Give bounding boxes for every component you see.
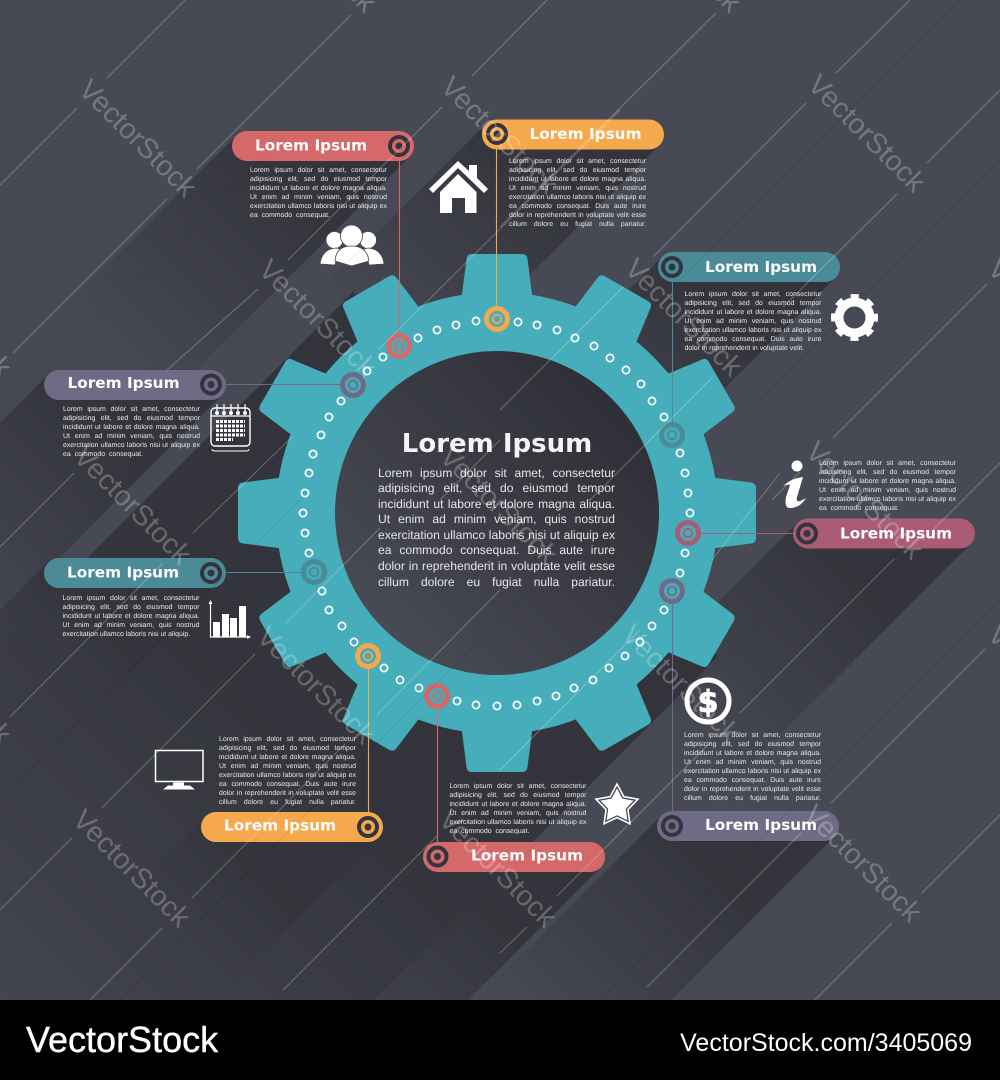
text block: red top left: Ut enim ad minim veniam, quis nostrud [250, 194, 387, 200]
pill: purple left: Lorem Ipsum [68, 374, 180, 392]
watermarks: VectorStock [615, 619, 746, 749]
icon: house [429, 161, 488, 213]
dotted ring [299, 317, 694, 710]
text block: magenta right: adipisicing elit, sed do eiusmod tempor [819, 468, 956, 476]
text block: purple left: incididunt ut labore et dolore magna aliqua. [63, 424, 200, 430]
text block: purple left: Lorem ipsum dolor sit amet, consectetur [63, 406, 200, 412]
text block: red top left: Lorem ipsum dolor sit amet, consectetur [250, 166, 387, 174]
pill: purple bottom right: Lorem Ipsum [705, 816, 817, 834]
text block: magenta right: Lorem ipsum dolor sit amet, consectetur [819, 460, 956, 466]
text block: teal top right: Lorem ipsum dolor sit amet, consectetur [684, 290, 822, 298]
icon: dollar coin [687, 680, 729, 722]
text block: orange top: ea commodo consequat. Duis aute irure [509, 202, 646, 210]
pill: orange top [482, 120, 664, 150]
text block: red bottom: Ut enim ad minim veniam, quis nostrud [450, 810, 586, 816]
center text block: incididunt ut labore et dolore magna aliqua. [378, 497, 615, 511]
center text block: cillum dolore eu fugiat nulla pariatur. [378, 575, 615, 589]
icon: bar chart [208, 600, 251, 639]
text block: orange bottom left: cillum dolore eu fugiat nulla pariatur. [219, 799, 356, 806]
watermarks: VectorStock [67, 441, 198, 571]
text block: purple bottom right: dolor in reprehenderit in voluptate velit esse [684, 786, 821, 792]
icon: monitor [156, 750, 203, 790]
text block: purple left: ea commodo consequat. [63, 450, 143, 458]
text block: teal left [62, 594, 200, 638]
center text block: dolor in reprehenderit in voluptate velit esse [378, 559, 615, 573]
text block: teal top right: exercitation ullamco laboris nisi ut aliquip ex [684, 326, 822, 334]
connector lines [224, 148, 795, 846]
footer bar [0, 1000, 1000, 1080]
text block: orange top: exercitation ullamco laboris nisi ut aliquip ex [509, 194, 646, 200]
text block: orange bottom left: dolor in reprehenderit in voluptate velit esse [219, 790, 356, 797]
text block: orange top: Lorem ipsum dolor sit amet, consectetur [509, 158, 646, 164]
text block: orange top: adipisicing elit, sed do eiusmod tempor [509, 166, 646, 174]
watermarks: VectorStock [801, 69, 932, 199]
center heading: Lorem Ipsum [402, 429, 592, 459]
text block: orange top: cillum dolore eu fugiat nulla pariatur. [509, 220, 646, 228]
text block: orange top [509, 158, 646, 228]
text block: purple bottom right: cillum dolore eu fugiat nulla pariatur. [684, 794, 821, 802]
icon: calendar [211, 404, 250, 451]
pill: magenta right: Lorem Ipsum [840, 524, 952, 542]
center text block: adipisicing elit, sed do eiusmod tempor [378, 481, 615, 495]
node: purple lower right [659, 578, 685, 604]
text block: purple left [63, 406, 200, 458]
watermarks: VectorStock [433, 441, 564, 571]
node: red bottom [424, 683, 450, 709]
node: orange lower left [355, 643, 381, 669]
pill: teal left [44, 558, 226, 588]
text block: red top left: incididunt ut labore et dolore magna aliqua. [250, 184, 387, 192]
text block: magenta right: ea commodo consequat. [819, 504, 899, 512]
footer bar: VectorStock [26, 1019, 219, 1060]
text block: purple bottom right: adipisicing elit, sed do eiusmod tempor [684, 740, 821, 748]
text block: teal top right: ea commodo consequat. Duis aute irure [684, 336, 822, 342]
text block: purple bottom right: Lorem ipsum dolor sit amet, consectetur [684, 732, 821, 738]
pill: teal left: Lorem Ipsum [67, 564, 179, 582]
center text block [378, 466, 615, 589]
watermarks: VectorStock [434, 71, 565, 201]
center text block: Lorem ipsum dolor sit amet, consectetur [378, 466, 615, 480]
icon: settings gear [834, 296, 876, 338]
long shadow: gear [0, 292, 718, 1080]
node: teal right [659, 422, 685, 448]
text block: orange bottom left: Ut enim ad minim veniam, quis nostrud [219, 763, 356, 770]
text block: teal left: exercitation ullamco laboris nisi ut aliquip. [62, 630, 190, 638]
pill: orange bottom left [201, 812, 383, 842]
text block: orange bottom left: exercitation ullamco laboris nisi ut aliquip ex [219, 772, 356, 779]
text block: purple bottom right: exercitation ullamco laboris nisi ut aliquip ex [684, 768, 821, 774]
text block: teal top right: adipisicing elit, sed do eiusmod tempor [684, 300, 822, 306]
pill: orange top: Lorem Ipsum [530, 125, 642, 143]
center text block: ea commodo consequat. Duis aute irure [378, 543, 615, 557]
text block: teal top right: Ut enim ad minim veniam, quis nostrud [684, 318, 822, 324]
node: red upper left [386, 333, 412, 359]
text block: teal left: incididunt ut labore et dolore magna aliqua. [62, 612, 200, 620]
pill: red bottom: Lorem Ipsum [471, 846, 583, 864]
pill: red top left [232, 131, 414, 161]
text block: orange top: incididunt ut labore et dolore magna aliqua. [509, 176, 646, 182]
node: magenta right [675, 520, 701, 546]
text block: red bottom: Lorem ipsum dolor sit amet, consectetur [450, 782, 586, 790]
text block: magenta right: incididunt ut labore et dolore magna aliqua. [819, 478, 956, 484]
pill: teal top right: Lorem Ipsum [705, 258, 817, 276]
text block: teal top right: dolor in reprehenderit in voluptate velit. [684, 344, 804, 352]
pill: purple left [44, 370, 226, 400]
text block: teal top right [684, 290, 822, 352]
text block: teal left: Lorem ipsum dolor sit amet, consectetur [62, 594, 200, 602]
pill: orange bottom left: Lorem Ipsum [224, 816, 336, 834]
pill: red top left: Lorem Ipsum [255, 136, 367, 154]
text block: teal left: adipisicing elit, sed do eiusmod tempor [62, 604, 200, 610]
watermarks: VectorStock [252, 254, 383, 384]
pill: teal top right [658, 252, 840, 282]
watermarks: VectorStock [66, 804, 197, 934]
text block: magenta right: Ut enim ad minim veniam, quis nostrud [819, 486, 956, 494]
text block: orange top: dolor in reprehenderit in voluptate velit esse [509, 212, 646, 218]
icon: info [783, 460, 806, 508]
text block: orange bottom left: incididunt ut labore et dolore magna aliqua. [219, 754, 356, 761]
text block: red bottom: incididunt ut labore et dolore magna aliqua. [450, 800, 586, 808]
footer bar: VectorStock.com/3405069 [680, 1029, 972, 1057]
text block: teal top right: incididunt ut labore et dolore magna aliqua. [684, 308, 822, 316]
watermarks: VectorStock [799, 436, 930, 566]
icon: star [596, 784, 638, 824]
center text block: Ut enim ad minim veniam, quis nostrud [378, 512, 615, 526]
text block: red top left: adipisicing elit, sed do eiusmod tempor [250, 176, 387, 182]
watermarks: VectorStock [797, 799, 928, 929]
text block: purple left: exercitation ullamco laboris nisi ut aliquip ex [63, 442, 200, 448]
text block: purple bottom right: ea commodo consequat. Duis aute irure [684, 776, 821, 784]
center text block: exercitation ullamco laboris nisi ut aliquip ex [378, 528, 615, 542]
text block: red bottom [450, 782, 586, 834]
text block: purple bottom right: Ut enim ad minim veniam, quis nostrud [684, 758, 821, 766]
text block: magenta right [819, 460, 956, 512]
watermarks: VectorStock [250, 621, 381, 751]
text block: red top left: ea commodo consequat. [250, 212, 330, 218]
text block: purple bottom right: incididunt ut labore et dolore magna aliqua. [684, 750, 821, 756]
node: orange top [484, 306, 510, 332]
icon: people [320, 225, 384, 266]
node: purple left [340, 372, 366, 398]
watermarks: VectorStock [72, 74, 203, 204]
gear [238, 254, 756, 772]
text block: red bottom: ea commodo consequat. [450, 828, 529, 834]
text block: magenta right: exercitation ullamco laboris nisi ut aliquip ex [819, 496, 956, 502]
text block: red top left: exercitation ullamco laboris nisi ut aliquip ex [250, 202, 387, 210]
text block: red bottom: adipisicing elit, sed do eiusmod tempor [450, 792, 586, 798]
text block: orange bottom left [219, 736, 356, 806]
pill: red bottom [423, 842, 605, 872]
gear nodes [301, 306, 701, 709]
pill: purple bottom right [657, 811, 839, 841]
text block: red top left [250, 166, 387, 218]
watermarks: VectorStock [432, 804, 563, 934]
text block: teal left: Ut enim ad minim veniam, quis nostrud [62, 622, 200, 628]
watermarks: VectorStock [618, 253, 749, 383]
pill: magenta right [793, 518, 975, 548]
gear hole [335, 351, 659, 675]
text block: purple left: adipisicing elit, sed do eiusmod tempor [63, 414, 200, 422]
text block: orange top: Ut enim ad minim veniam, quis nostrud [509, 184, 646, 192]
text block: orange bottom left: adipisicing elit, sed do eiusmod tempor [219, 745, 356, 752]
text block: red bottom: exercitation ullamco laboris nisi ut aliquip ex [450, 818, 586, 826]
text block: purple bottom right [684, 732, 821, 802]
icon: dollar coin: $ [698, 685, 718, 720]
text block: orange bottom left: Lorem ipsum dolor sit amet, consectetur [219, 736, 356, 743]
text block: orange bottom left: ea commodo consequat. Duis aute irure [219, 781, 356, 788]
node: teal left [301, 559, 327, 585]
text block: purple left: Ut enim ad minim veniam, quis nostrud [63, 432, 200, 440]
